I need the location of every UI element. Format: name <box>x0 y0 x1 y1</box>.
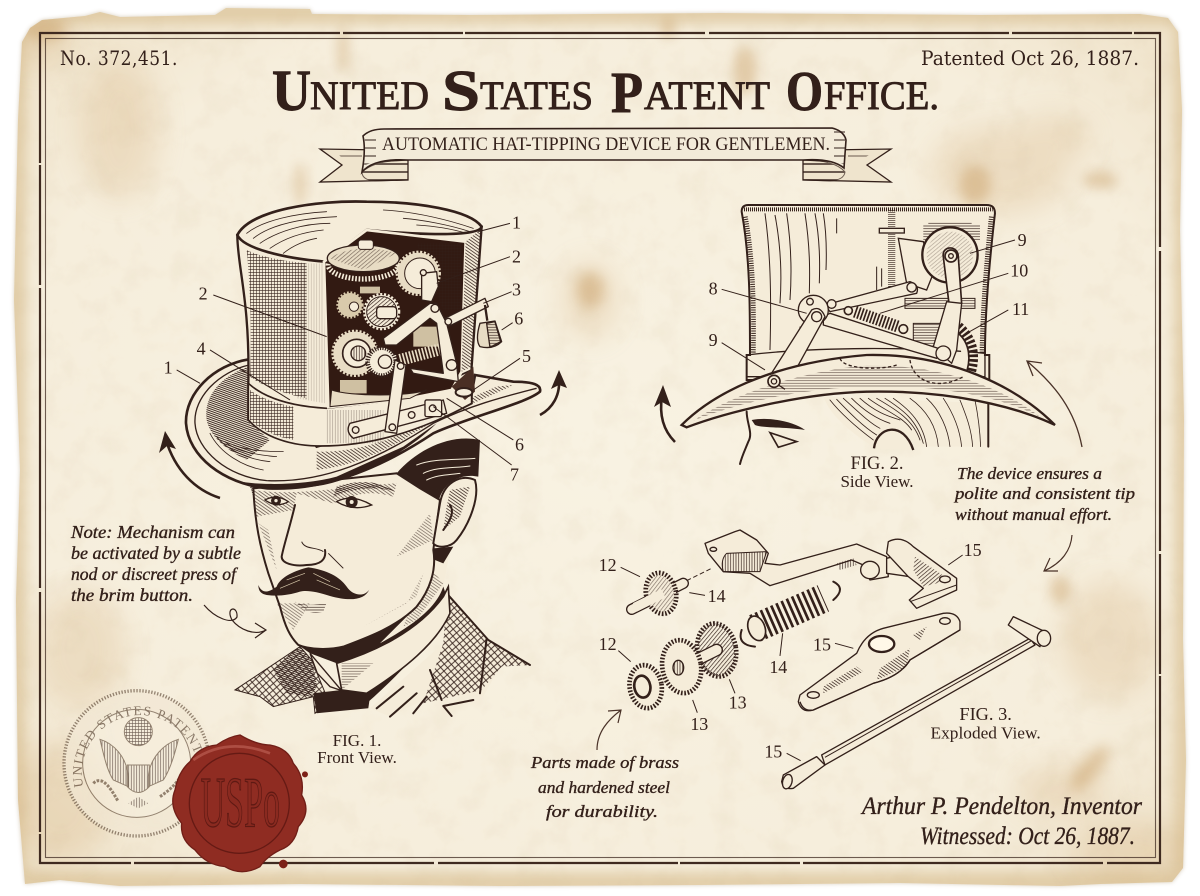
title: O <box>786 61 823 123</box>
brow and eye <box>740 412 750 464</box>
note: mechanism: the brim button. <box>71 585 193 605</box>
ribbon centre band <box>362 128 846 172</box>
side brim <box>682 355 1055 427</box>
figure 3 leader lines and numbers: 13 <box>729 693 747 713</box>
figure 3 leader lines and numbers: 15 <box>764 742 782 762</box>
thin arrow toward side view <box>1027 361 1082 447</box>
figure 3 leader lines and numbers: 14 <box>769 657 787 677</box>
background mechanism blocks <box>340 287 440 393</box>
title ribbon banner <box>320 128 891 182</box>
title: S <box>442 58 480 123</box>
figure 3 caption: FIG. 3. <box>959 704 1012 724</box>
thin arrow toward gears <box>597 710 621 750</box>
main drive gear and worm <box>333 332 450 376</box>
ribbon right tail <box>803 149 891 182</box>
nose <box>282 505 325 565</box>
cutaway interior <box>324 230 466 407</box>
note: the device <box>954 464 1135 524</box>
long rod part <box>781 617 1051 790</box>
mechanism background <box>879 210 980 347</box>
figure 3 leader lines and numbers: 13 <box>690 714 708 734</box>
seal ring text: UNITED STATES PATENT OFFICE <box>72 706 202 788</box>
figure 1 leader lines and numbers: 3 <box>512 279 521 299</box>
crown top <box>237 201 482 262</box>
figure 2 leader lines and numbers: 9 <box>1018 230 1027 250</box>
figure 2: side view <box>682 205 1055 464</box>
embossed USPO seal <box>62 689 209 838</box>
toothed sector <box>955 323 973 380</box>
hair <box>397 439 480 510</box>
figure 2 leader lines and numbers: 10 <box>1010 261 1028 281</box>
title <box>272 58 939 125</box>
note: parts made of brass <box>530 753 679 821</box>
figure 1 leader lines and numbers: 7 <box>510 464 519 484</box>
figure 1 leader lines and numbers: 6 <box>515 434 524 454</box>
thin arrow toward exploded view <box>1044 535 1072 571</box>
figure 3 caption <box>931 704 1041 742</box>
figure 3 leader lines and numbers: 12 <box>599 555 617 575</box>
rotation arrow right of figure 1 <box>540 370 567 415</box>
figure 2 leader lines and numbers <box>709 230 1029 370</box>
inventor signature: Arthur P. Pendelton, Inventor <box>860 793 1142 820</box>
figure 2 caption <box>840 454 914 491</box>
crank lever part <box>705 530 888 586</box>
title: FFICE. <box>824 73 939 118</box>
figure 1 leader lines and numbers: 1 <box>512 213 521 233</box>
jacket right <box>370 593 530 717</box>
figure 1 caption <box>317 731 397 767</box>
inventor signature: Witnessed: Oct 26, 1887. <box>920 823 1135 850</box>
face <box>253 473 440 649</box>
side crown <box>742 205 995 380</box>
jacket left <box>235 647 342 713</box>
figure 1 leader lines and numbers: 6 <box>514 308 523 328</box>
figure 1 caption: FIG. 1. <box>333 731 381 750</box>
title: P <box>611 60 643 125</box>
title: TATES <box>480 73 593 118</box>
title: NITED <box>310 73 429 118</box>
figure 3 leader lines and numbers: 12 <box>599 634 617 654</box>
flat link part <box>798 613 960 711</box>
eagle emblem <box>93 718 182 808</box>
flywheel <box>922 227 978 313</box>
note: mechanism: be activated by a subtle <box>71 543 241 563</box>
figure 2 leader lines and numbers: 8 <box>709 278 718 298</box>
counterweight <box>477 305 502 348</box>
ear outline <box>874 430 913 450</box>
small gears <box>338 293 398 328</box>
figure 1 leader lines and numbers: 5 <box>522 346 531 366</box>
figure 1 leader lines and numbers: 4 <box>197 338 206 358</box>
ribbon left tail <box>320 149 408 182</box>
rotation arrow left of figure 1 <box>159 431 220 498</box>
top large gear <box>327 240 399 279</box>
note: the device: The device ensures a <box>957 464 1102 483</box>
figure 3 caption: Exploded View. <box>931 723 1041 742</box>
ear <box>433 478 476 547</box>
figure 3 leader lines and numbers: 15 <box>813 635 831 655</box>
three gears <box>626 620 740 711</box>
spring part <box>741 582 840 647</box>
neck <box>380 547 450 643</box>
figure 1 caption: Front View. <box>317 748 397 767</box>
figure 3: exploded view <box>599 530 1051 790</box>
figure 3 leader lines and numbers <box>599 540 1041 762</box>
head hair <box>823 397 988 447</box>
note: parts made of brass: Parts made of brass <box>530 753 679 772</box>
figure 1: portrait of gentleman <box>235 439 530 717</box>
subtitle: AUTOMATIC HAT-TIPPING DEVICE FOR GENTLEMEN. <box>382 135 830 155</box>
figure 1 leader lines and numbers: 2 <box>199 283 208 303</box>
note: mechanism: nod or discreet press of <box>71 564 238 584</box>
note: parts made of brass: for durability. <box>546 802 658 821</box>
crown body <box>237 227 482 441</box>
title: U <box>272 58 311 123</box>
gear with shaft <box>632 568 712 617</box>
note: mechanism <box>70 522 241 605</box>
note: parts made of brass: and hardened steel <box>538 778 670 797</box>
note: the device: polite and consistent tip <box>954 484 1135 503</box>
mustache <box>258 567 369 599</box>
figure 3 leader lines and numbers: 14 <box>708 586 726 606</box>
patent number: No. 372,451. <box>60 47 178 70</box>
eyes <box>265 496 372 508</box>
hat band <box>248 370 472 446</box>
brim button <box>452 367 475 400</box>
note: mechanism: Note: Mechanism can <box>70 522 235 542</box>
red wax seal: USPo <box>201 764 280 843</box>
figure 1 leader lines and numbers: 1 <box>164 358 173 378</box>
mounting bracket part <box>861 539 957 608</box>
spring <box>844 307 908 333</box>
figure 1: top hat with mechanism <box>164 201 540 489</box>
inventor signature <box>860 793 1142 850</box>
figure 1 leader lines and numbers: 2 <box>512 247 521 267</box>
arrow from note to face <box>204 605 266 638</box>
collar <box>337 587 450 693</box>
figure 1 leader lines and numbers <box>164 213 531 484</box>
figure 3 leader lines and numbers: 15 <box>964 540 982 560</box>
rotation arrow left of figure 2 <box>654 385 675 442</box>
figure 2 leader lines and numbers: 9 <box>709 330 718 350</box>
right gear <box>398 253 439 294</box>
note: the device: without manual effort. <box>955 505 1112 524</box>
hat brim <box>186 359 540 489</box>
red wax seal <box>173 735 308 872</box>
title: ATENT <box>644 73 770 118</box>
figure 2 caption: FIG. 2. <box>851 454 903 474</box>
patent date: Patented Oct 26, 1887. <box>921 47 1139 70</box>
linkage arms <box>768 282 962 389</box>
figure 2 leader lines and numbers: 11 <box>1012 299 1029 319</box>
figure 2 caption: Side View. <box>840 472 914 491</box>
neck shadow and tie <box>298 587 450 703</box>
levers and linkage <box>348 270 488 438</box>
